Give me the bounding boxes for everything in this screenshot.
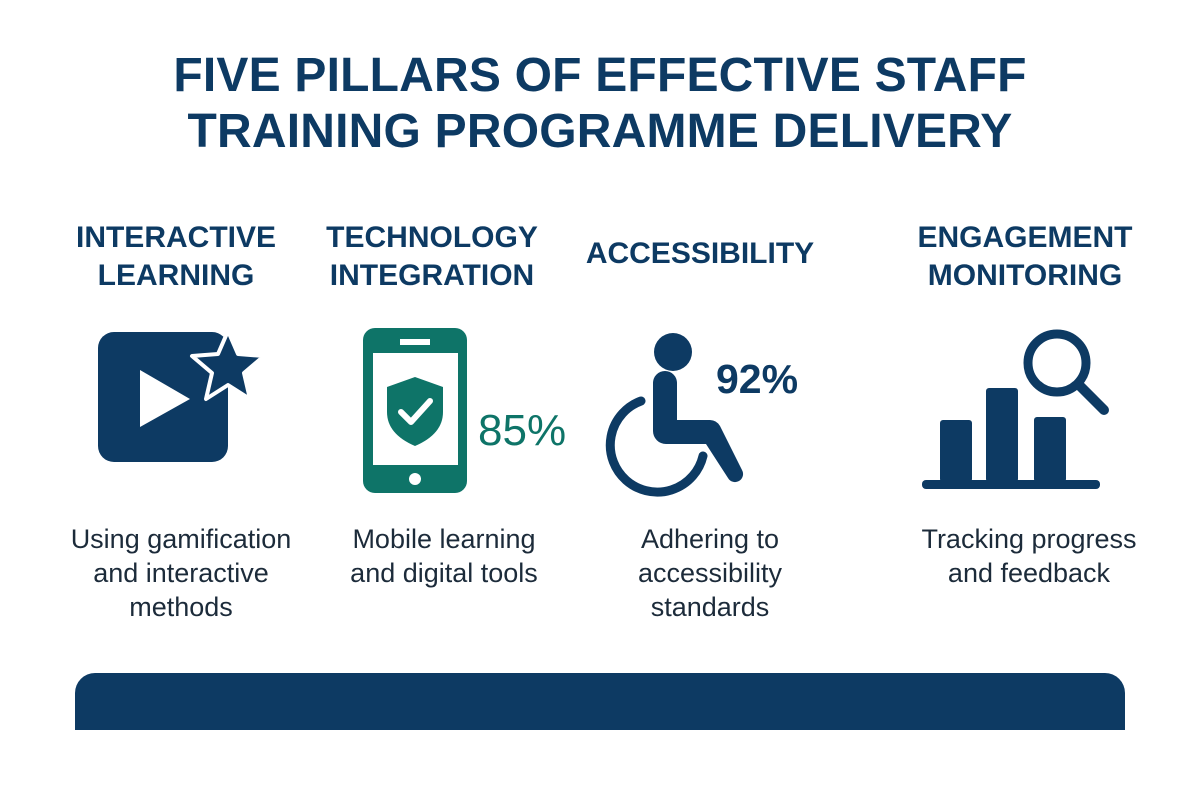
text: engagement: and feedback <box>948 558 1110 588</box>
text: interactive learning: and interactive <box>93 558 269 588</box>
bottom bar <box>75 673 1125 730</box>
heading: engagement monitoring <box>917 221 1132 292</box>
text: accessibility <box>638 524 782 622</box>
icon: phone with shield <box>363 328 467 493</box>
text: technology: and digital tools <box>350 558 538 588</box>
text: interactive learning: methods <box>129 592 233 622</box>
stat: 92%: 92% <box>716 356 798 402</box>
heading: technology integration: INTEGRATION <box>330 259 534 292</box>
text: accessibility: accessibility <box>638 558 782 588</box>
text: interactive learning <box>71 524 291 622</box>
stat: 85%: 85% <box>478 406 566 455</box>
icon: bar chart with magnifier <box>922 334 1104 489</box>
text: accessibility: Adhering to <box>641 524 779 554</box>
icon: video with star <box>98 331 264 462</box>
title: FIVE PILLARS OF EFFECTIVE STAFF <box>173 49 1027 102</box>
heading: engagement monitoring: ENGAGEMENT <box>917 221 1132 254</box>
text: technology <box>350 524 538 588</box>
heading: interactive learning: LEARNING <box>98 259 254 292</box>
heading: technology integration: TECHNOLOGY <box>326 221 538 254</box>
icon: wheelchair <box>610 333 743 492</box>
heading: technology integration <box>326 221 538 292</box>
title <box>173 49 1027 158</box>
text: engagement <box>921 524 1137 588</box>
text: interactive learning: Using gamification <box>71 524 291 554</box>
heading: accessibility: ACCESSIBILITY <box>586 237 814 270</box>
heading: interactive learning: INTERACTIVE <box>76 221 276 254</box>
text: engagement: Tracking progress <box>921 524 1137 554</box>
text: accessibility: standards <box>651 592 769 622</box>
text: technology: Mobile learning <box>352 524 536 554</box>
title: TRAINING PROGRAMME DELIVERY <box>188 105 1012 158</box>
heading: interactive learning <box>76 221 276 292</box>
heading: engagement monitoring: MONITORING <box>928 259 1122 292</box>
